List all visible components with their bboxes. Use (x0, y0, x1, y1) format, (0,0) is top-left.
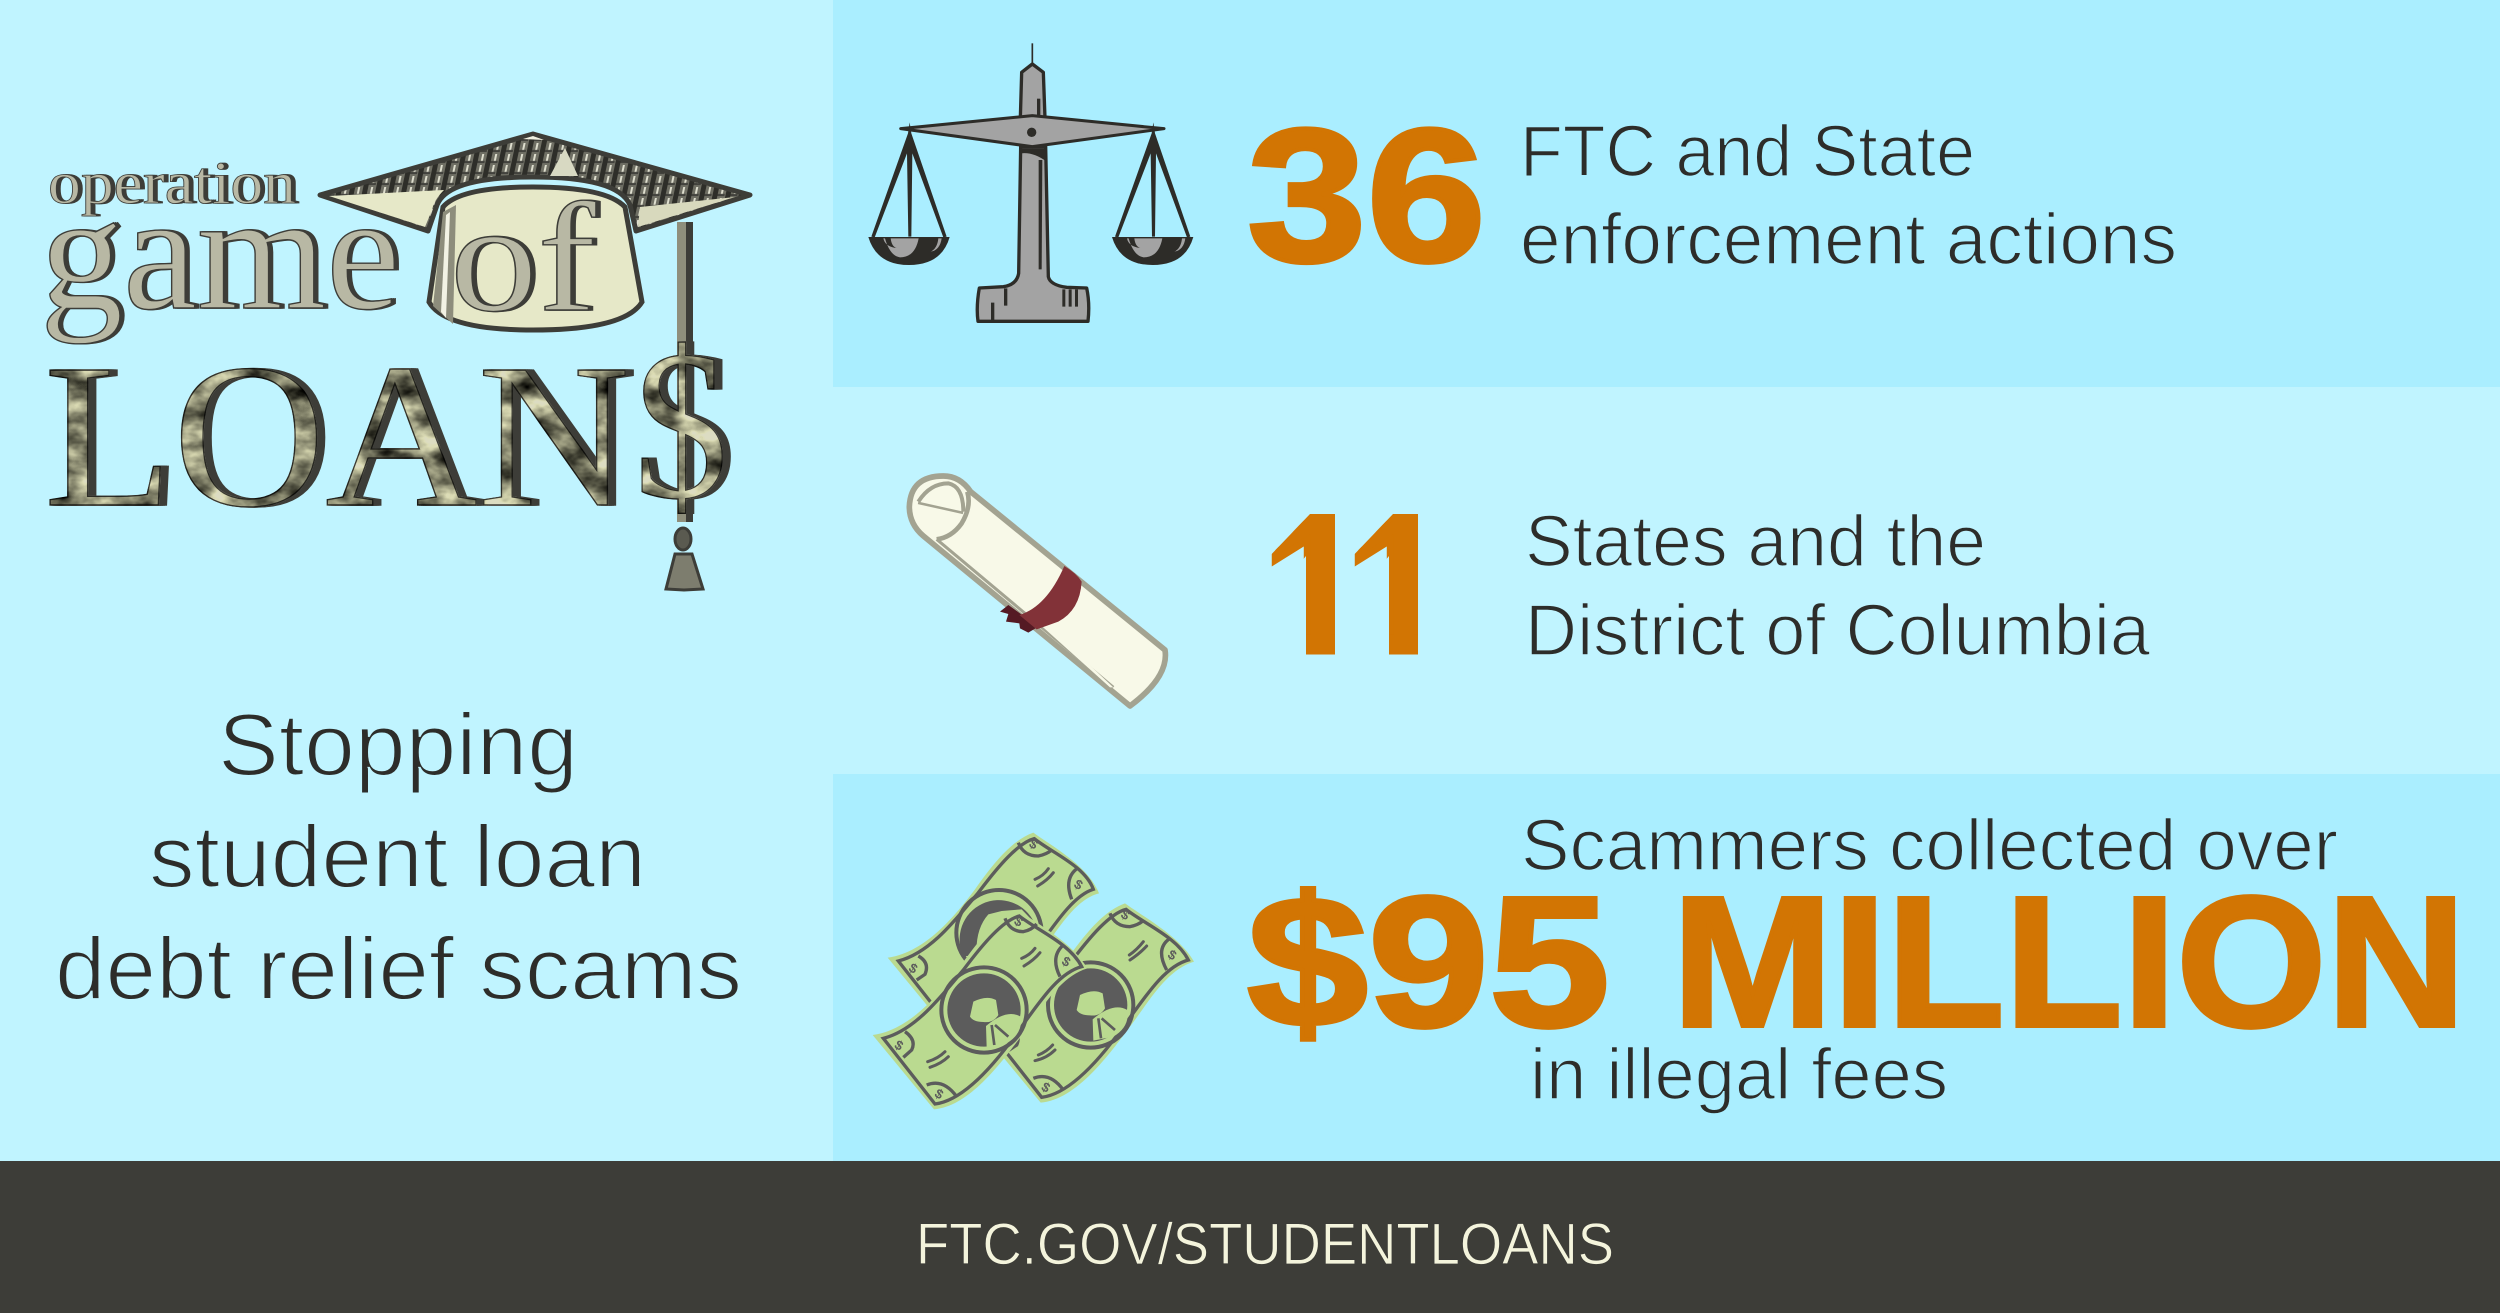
text: District of Columbia: District of Columbia (1525, 591, 2151, 671)
bill: back left (888, 833, 1099, 1032)
footer url: FTC.GOV/STUDENTLOANS (916, 1212, 1614, 1277)
tassel (666, 528, 703, 590)
ribbon tails (1000, 605, 1038, 633)
right pan (1112, 122, 1193, 265)
bill: front: $ (1059, 953, 1074, 970)
panel: states (833, 387, 2500, 774)
footer bar (0, 1161, 2500, 1313)
panel: money collected (833, 774, 2500, 1161)
digit 1: 1 (1345, 476, 1453, 693)
icon: scales of justice (868, 43, 1193, 321)
logo dollar sign: $ (634, 307, 728, 544)
logo: operation game of loans (40, 134, 750, 590)
text: enforcement actions: enforcement actions (1520, 200, 2177, 280)
bill: front: $ (932, 1086, 947, 1103)
logo word: operation: operation (48, 150, 296, 216)
text: in illegal fees: in illegal fees (1530, 1035, 1948, 1115)
bill: back left: $ (906, 960, 921, 977)
stat: MILLION: MILLION (1672, 859, 2466, 1066)
tagline line 3: debt relief scams (55, 919, 742, 1018)
stat: 11 (1272, 514, 1418, 654)
panel: left background (0, 0, 833, 1161)
bill: front: $ (892, 1037, 906, 1054)
stat: 36: 36 (1247, 90, 1486, 302)
bill: right: $ (1118, 906, 1133, 923)
logo word: LOANS: LOAN (44, 321, 630, 550)
text: States and the: States and the (1525, 502, 1986, 582)
logo word: of: of (450, 171, 596, 344)
bill: right: $ (1165, 947, 1180, 964)
ribbon (1019, 566, 1082, 629)
text: Scammers collected over: Scammers collected over (1521, 806, 2338, 886)
bill: right: $ (1039, 1079, 1053, 1096)
icon: diploma scroll (909, 476, 1165, 706)
icon: dollar bills (873, 833, 1194, 1109)
digit 1: 1 (1262, 476, 1370, 693)
bill: front (873, 910, 1087, 1109)
bill: right: $ (998, 1031, 1012, 1048)
bill: back left: $ (1027, 836, 1041, 853)
text: FTC and State: FTC and State (1520, 112, 1975, 192)
tassel cord (677, 222, 693, 522)
bill: front: $ (1012, 913, 1026, 930)
tagline line 1: Stopping (218, 695, 578, 794)
tagline line 2: student loan (149, 807, 646, 906)
tagline (55, 695, 742, 1018)
left pan (868, 122, 950, 265)
bill: right (979, 903, 1194, 1103)
panel: enforcement actions (833, 0, 2500, 387)
bill: back left: $ (1072, 876, 1086, 893)
stat: $95: $95 (1247, 859, 1610, 1066)
graduation cap (320, 134, 750, 590)
logo word: game: game (40, 160, 400, 344)
